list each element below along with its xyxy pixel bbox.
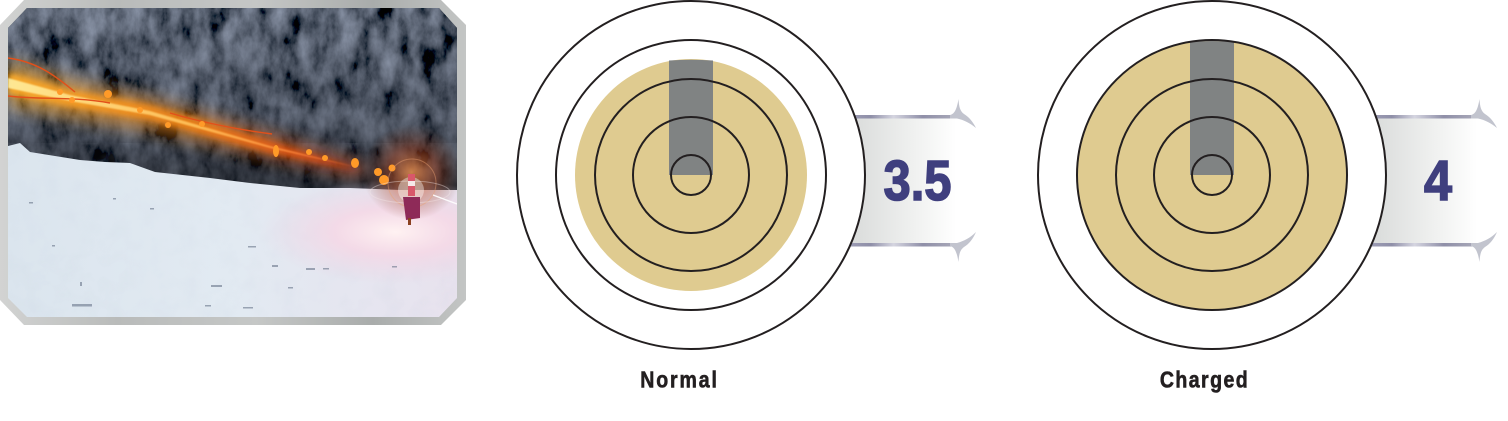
- range rings: [1077, 40, 1347, 310]
- outer circle: [1038, 1, 1386, 349]
- label: Charged: Charged: [1160, 367, 1249, 393]
- fire beam: [8, 60, 366, 176]
- grey range bar: [669, 60, 713, 175]
- outer circle: [517, 1, 865, 349]
- diagram: Normal: [517, 1, 976, 393]
- value: 4: 4: [1424, 149, 1452, 213]
- range rings: [556, 40, 826, 310]
- gold area of effect: [575, 59, 807, 291]
- gold area of effect: [1077, 40, 1347, 310]
- value: 3.5: 3.5: [884, 149, 952, 213]
- value tab: 4: [1371, 99, 1497, 262]
- value tab: 3.5: [850, 99, 976, 262]
- diagram: Charged: [1038, 1, 1497, 393]
- snow specks: [29, 198, 397, 308]
- panel: screenshot with fire beam: [0, 0, 466, 325]
- snow ground: [8, 143, 457, 317]
- character with magic ring: [370, 159, 457, 225]
- grey range bar: [1190, 41, 1234, 175]
- picture frame: [0, 0, 466, 325]
- game scene: [8, 8, 457, 317]
- sparks along beam: [57, 89, 396, 185]
- label: Normal: Normal: [640, 367, 719, 393]
- fire glow: [368, 129, 456, 218]
